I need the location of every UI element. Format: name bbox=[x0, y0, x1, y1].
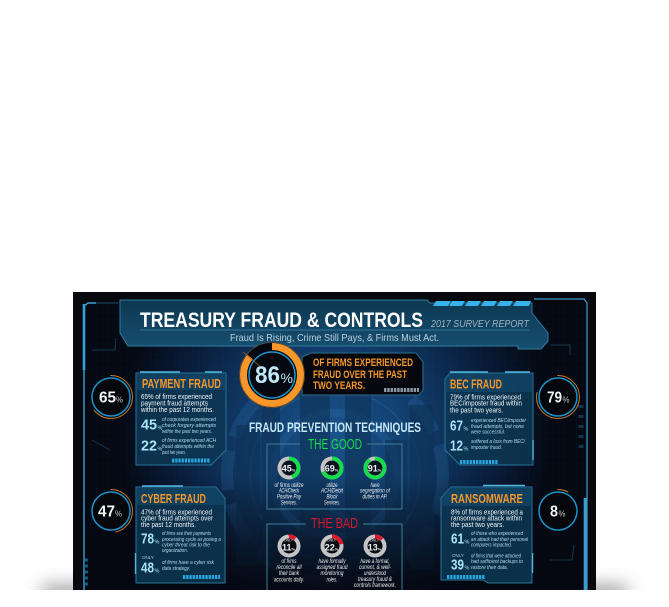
stat 78 percent: cyber threat risk to the bbox=[162, 542, 210, 548]
survey report label: 2017 SURVEY REPORT bbox=[430, 318, 530, 330]
stat 22 percent: fraud attempts within the bbox=[162, 444, 214, 450]
ransomware body bbox=[451, 508, 524, 529]
bad captions: monitoring bbox=[320, 571, 344, 577]
cyber fraud body: cyber fraud attempts over bbox=[141, 514, 213, 522]
stat 67 percent: fraud attempts, but none bbox=[471, 424, 524, 430]
stat 67 percent: 67 bbox=[450, 418, 463, 434]
BEC fraud title: BEC FRAUD bbox=[450, 378, 502, 392]
stat 67 percent: % bbox=[464, 426, 468, 432]
payment fraud title: PAYMENT FRAUD bbox=[142, 377, 221, 391]
stat 45 percent: 45 bbox=[141, 416, 157, 434]
board background bbox=[73, 292, 596, 590]
ring 11 percent: 11% bbox=[282, 542, 295, 552]
cyber fraud body: the past 12 months. bbox=[141, 520, 196, 529]
bad captions: understood bbox=[364, 571, 386, 577]
bad captions: have formally bbox=[318, 559, 346, 565]
stat 22 percent: % bbox=[158, 446, 162, 452]
good captions: ACH/Check bbox=[278, 488, 300, 494]
stat 22 percent: of firms experienced ACH bbox=[162, 438, 216, 444]
outer frame lines bbox=[84, 299, 587, 590]
subtitle: Fraud Is Rising, Crime Still Pays, & Firms Must Act. bbox=[230, 332, 439, 344]
good captions: of firms utilize bbox=[274, 483, 304, 489]
stat 48 percent: of firms have a cyber risk bbox=[162, 560, 214, 566]
good captions: Block bbox=[326, 494, 338, 500]
banner: 86 percent callout: FRAUD OVER THE PAST bbox=[313, 369, 407, 381]
stat 12 percent: suffered a loss from BEC/ bbox=[471, 439, 525, 445]
stat 39 percent: 39 bbox=[451, 556, 464, 574]
BEC fraud body: the past two years. bbox=[450, 406, 503, 414]
stat 12 percent: imposter fraud. bbox=[471, 445, 502, 451]
ring 69 percent: 69% bbox=[325, 464, 339, 474]
payment fraud body: payment fraud attempts bbox=[141, 398, 208, 408]
panel: payment fraud bbox=[136, 372, 226, 465]
good captions: utilize bbox=[326, 483, 338, 489]
stat 45 percent: check forgery attempts bbox=[162, 423, 216, 429]
stat 45 percent: % bbox=[158, 426, 162, 432]
stat 61 percent: % bbox=[464, 540, 470, 546]
stat 39 percent: % bbox=[464, 566, 470, 572]
panel: the good bbox=[267, 437, 402, 509]
BEC fraud body bbox=[450, 392, 522, 414]
gauge: ransomware 8 percent bbox=[536, 490, 580, 532]
stat 22 percent: 22 bbox=[141, 438, 157, 454]
panel: cyber fraud bbox=[136, 486, 225, 583]
bad captions: roles. bbox=[326, 578, 338, 584]
panel: BEC fraud bbox=[445, 372, 533, 465]
cyber fraud body: 47% of firms experienced bbox=[141, 508, 212, 516]
the good heading: THE GOOD bbox=[308, 437, 362, 453]
gauge: BEC fraud 79 percent: 79 bbox=[547, 390, 562, 406]
stat 78 percent: 78 bbox=[141, 530, 154, 548]
gauge: cyber fraud 47 percent bbox=[90, 490, 132, 532]
good captions: have bbox=[370, 483, 380, 489]
ring 13 percent: 13% bbox=[368, 542, 382, 552]
payment fraud body bbox=[140, 392, 214, 414]
BEC fraud body: 79% of firms experienced bbox=[450, 392, 521, 402]
chart: 86 percent ring: 86 bbox=[255, 362, 280, 389]
stat 78 percent bbox=[141, 530, 221, 554]
cyber fraud title: CYBER FRAUD bbox=[141, 492, 206, 506]
bad captions: reconcile all bbox=[276, 565, 302, 571]
gauge: payment fraud 65 percent bbox=[90, 376, 132, 418]
stat 12 percent: 12 bbox=[450, 438, 463, 454]
stat 48 percent: 48 bbox=[141, 560, 154, 576]
the bad heading: THE BAD bbox=[311, 516, 358, 532]
callout text: OF FIRMS EXPERIENCED bbox=[313, 357, 413, 369]
title: TREASURY FRAUD & CONTROLS bbox=[140, 309, 423, 332]
ring 45 percent: 45% bbox=[282, 464, 296, 474]
ring 91 percent: 91% bbox=[368, 464, 382, 474]
ring 22 percent bbox=[322, 536, 342, 556]
stat 22 percent bbox=[141, 438, 216, 456]
good captions: segregation of bbox=[360, 488, 391, 494]
panel: ransomware bbox=[441, 486, 532, 583]
good captions: Positive Pay bbox=[277, 494, 302, 500]
stat 48 percent: % bbox=[154, 568, 160, 574]
stat 67 percent: experienced BEC/imposter bbox=[471, 418, 526, 424]
ransomware title: RANSOMWARE bbox=[451, 492, 523, 506]
gauge: payment fraud 65 percent: % bbox=[116, 396, 123, 404]
stat 12 percent: % bbox=[464, 446, 468, 452]
ransomware body: 8% of firms experienced a bbox=[451, 508, 524, 516]
ring 13 percent bbox=[366, 536, 384, 556]
stat 39 percent: restore their data. bbox=[471, 565, 508, 571]
stat 12 percent bbox=[450, 438, 525, 454]
ring 11 percent: ONLY bbox=[284, 538, 294, 542]
banner: 86 percent callout bbox=[302, 353, 423, 395]
gauge: payment fraud 65 percent: 65 bbox=[99, 390, 116, 406]
stat 48 percent bbox=[141, 555, 214, 576]
stat 61 percent: of those who experienced bbox=[471, 531, 524, 537]
stat 39 percent: of firms that were attacked bbox=[471, 554, 522, 560]
bad captions: current, & well- bbox=[359, 565, 391, 571]
stat 61 percent bbox=[451, 530, 529, 548]
chart: 86 percent ring bbox=[240, 342, 304, 408]
bad captions: treasury fraud & bbox=[358, 577, 392, 583]
good captions: duties in AP. bbox=[362, 494, 388, 500]
gauge: BEC fraud 79 percent bbox=[536, 376, 580, 418]
bad captions: assigned fraud bbox=[316, 565, 348, 571]
stat 78 percent: of firms see their payments bbox=[162, 531, 211, 537]
stat 78 percent: processing cycle as posing a bbox=[161, 537, 221, 543]
ring 13 percent: ONLY bbox=[370, 538, 380, 542]
ring 22 percent: 22% bbox=[325, 542, 339, 552]
good captions: ACH/Debit bbox=[320, 488, 343, 494]
stat 67 percent bbox=[450, 418, 526, 436]
bad captions: controls framework. bbox=[354, 583, 396, 589]
gauge: ransomware 8 percent: 8 bbox=[550, 504, 558, 520]
heading: fraud prevention techniques: FRAUD PREVENTION TECHNIQUES bbox=[249, 419, 421, 435]
gauge: cyber fraud 47 percent: 47 bbox=[98, 504, 115, 520]
stat 39 percent: ONLY bbox=[452, 553, 464, 558]
payment fraud body: within the past 12 months. bbox=[140, 405, 214, 414]
stat 67 percent: were successful. bbox=[471, 430, 505, 436]
stat 78 percent: organization. bbox=[162, 548, 188, 554]
good captions: Services. bbox=[324, 500, 340, 506]
bad captions: of firms bbox=[282, 559, 296, 565]
gauge: BEC fraud 79 percent: % bbox=[562, 396, 570, 404]
panel: the bad bbox=[267, 516, 402, 590]
BEC fraud body: BEC/imposter fraud within bbox=[450, 398, 522, 408]
good captions bbox=[274, 483, 391, 506]
bad captions: have a formal, bbox=[360, 559, 390, 565]
header banner bbox=[120, 300, 548, 349]
cyber fraud body bbox=[141, 508, 213, 529]
ransomware body: the past two years. bbox=[451, 520, 504, 529]
gauge: ransomware 8 percent: % bbox=[558, 510, 566, 518]
board drop shadow bbox=[42, 586, 627, 600]
ring 11 percent bbox=[280, 536, 298, 556]
ransomware body: ransomware attack within bbox=[451, 514, 522, 522]
banner: 86 percent callout: TWO YEARS. bbox=[313, 380, 365, 392]
stat 45 percent: of corporates experienced bbox=[162, 417, 217, 423]
ring 22 percent: ONLY bbox=[327, 538, 337, 542]
chart: 86 percent ring: % bbox=[280, 370, 293, 386]
stat 78 percent: % bbox=[154, 540, 160, 546]
bad captions: accounts daily. bbox=[274, 578, 304, 584]
gauge: cyber fraud 47 percent: % bbox=[115, 510, 122, 518]
stat 39 percent bbox=[451, 553, 523, 574]
stat 45 percent bbox=[141, 416, 217, 435]
bad captions: their bank bbox=[279, 571, 300, 577]
stat 22 percent: past two years. bbox=[161, 450, 186, 456]
stat 61 percent: an attack had their personal bbox=[471, 537, 529, 543]
stat 39 percent: had sufficient backups to bbox=[471, 559, 523, 565]
stat 48 percent: ONLY bbox=[142, 555, 154, 560]
stat 61 percent: computers impacted. bbox=[471, 542, 512, 548]
stat 45 percent: within the past two years. bbox=[162, 429, 212, 435]
infographic canvas bbox=[32, 292, 636, 590]
stat 48 percent: data strategy. bbox=[162, 566, 190, 572]
bad captions bbox=[274, 559, 396, 589]
good captions: Services. bbox=[281, 500, 297, 506]
payment fraud body: 65% of firms experienced bbox=[141, 392, 212, 401]
stat 61 percent: 61 bbox=[451, 530, 464, 548]
header tab stripes bbox=[433, 301, 531, 306]
